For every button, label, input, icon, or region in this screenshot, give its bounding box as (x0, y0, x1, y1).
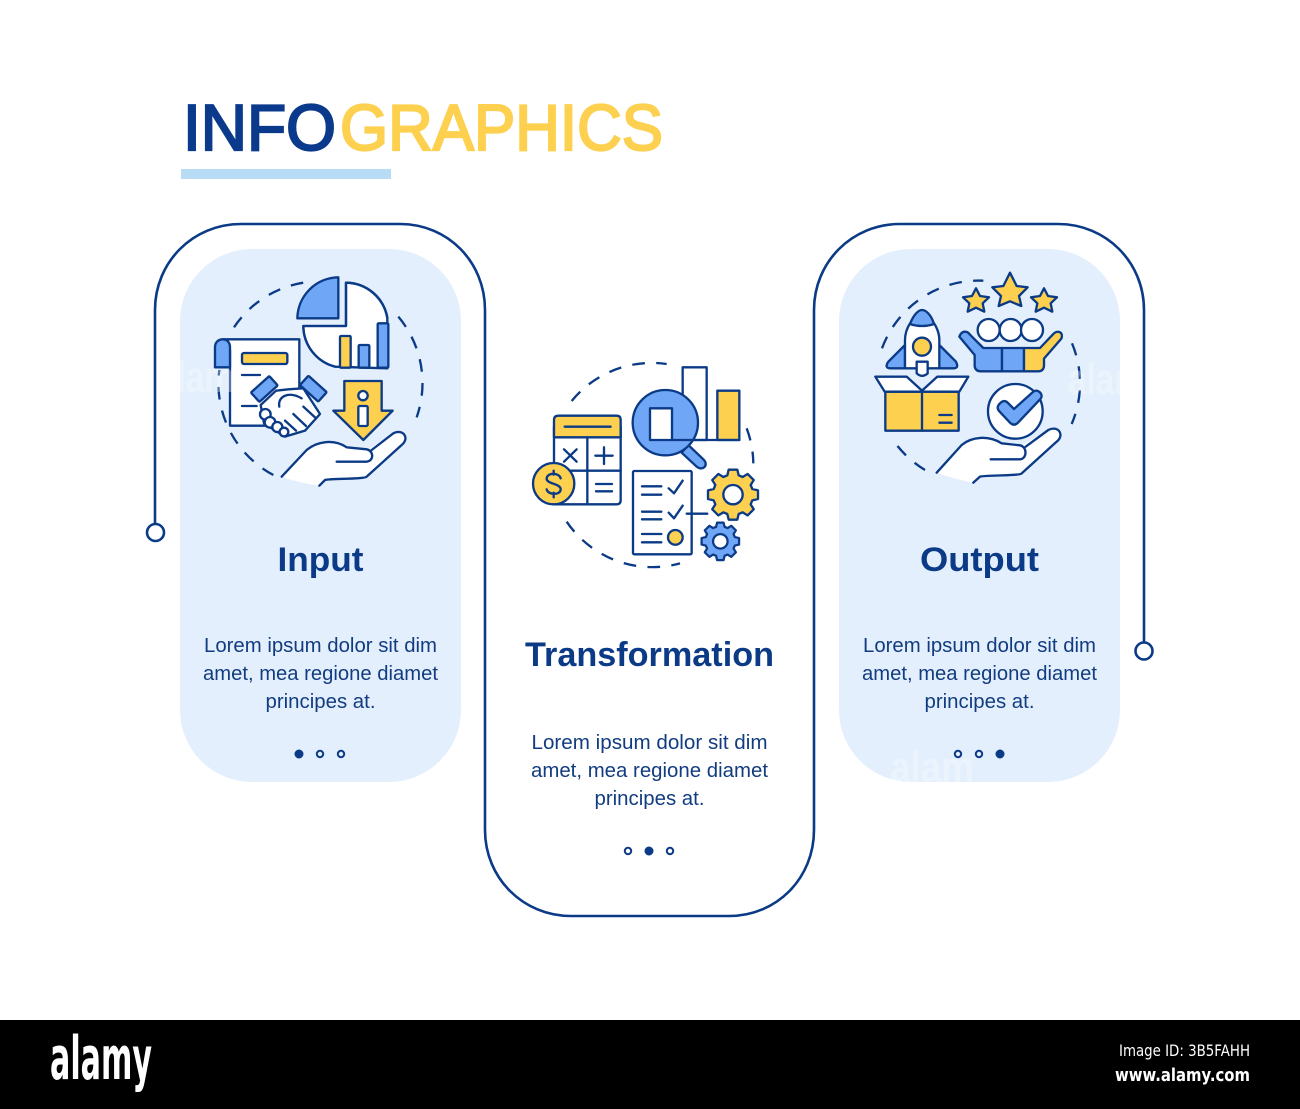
icon: calculator (554, 416, 621, 504)
watermark: output panel: alam (890, 743, 974, 792)
icon: dashed circle (882, 281, 1080, 470)
pagination dots: input (296, 750, 344, 758)
icon: contract document (215, 339, 299, 426)
text block: transformation (525, 636, 774, 810)
text block: transformation: amet, mea regione diamet (531, 760, 768, 782)
panel: output background (839, 249, 1120, 782)
footer logo: alamy (50, 1024, 152, 1094)
icon: dashed circle (567, 363, 753, 567)
pagination dots: output (955, 750, 1004, 758)
title: GRAPHICS (340, 91, 663, 164)
text block: output (862, 541, 1097, 713)
text block: output: Output (920, 541, 1039, 579)
pagination dots: transformation (625, 848, 673, 854)
icon: output (875, 273, 1080, 483)
icon: hand (937, 429, 1060, 483)
text block: output: principes at. (924, 691, 1034, 713)
icon: checklist (633, 471, 707, 554)
text block: transformation: Lorem ipsum dolor sit dim (532, 732, 768, 754)
icon: hand (282, 432, 405, 486)
icon: box (875, 377, 968, 431)
icon: handshake (251, 376, 327, 437)
text block: input: amet, mea regione diamet (203, 663, 438, 685)
title (183, 91, 663, 164)
title underline (181, 169, 391, 179)
icon: rocket (887, 310, 957, 376)
icon: pie chart (297, 277, 388, 368)
text block: input (203, 541, 438, 713)
text block: transformation: Transformation (525, 636, 774, 674)
text block: output: Lorem ipsum dolor sit dim (863, 635, 1096, 657)
text block: input: principes at. (266, 691, 376, 713)
text block: input: Lorem ipsum dolor sit dim (204, 635, 437, 657)
icon: small gear (702, 523, 739, 560)
icon: bar chart with magnifier (633, 367, 739, 468)
icon: large gear (708, 470, 758, 520)
icon: transformation (533, 363, 758, 567)
icon: info arrow (333, 381, 393, 440)
text block: input: Input (278, 541, 364, 579)
watermark: right edge: alam (1068, 355, 1144, 404)
icon: team (959, 319, 1062, 371)
text block: transformation: principes at. (594, 788, 704, 810)
text block: output: amet, mea regione diamet (862, 663, 1097, 685)
icon: input (215, 277, 423, 486)
watermark: left edge: alam (158, 353, 234, 402)
icon: check badge (988, 384, 1043, 439)
panel: input background (180, 249, 461, 782)
icon: dollar coin (533, 463, 574, 504)
connecting outline (147, 224, 1152, 916)
footer bar (0, 1020, 1300, 1109)
footer image id: Image ID: 3B5FAHH (1119, 1041, 1250, 1060)
title: INFO (183, 91, 336, 164)
icon: stars (963, 273, 1057, 312)
footer url: www.alamy.com (1115, 1065, 1250, 1086)
icon: dashed circle (218, 283, 423, 475)
